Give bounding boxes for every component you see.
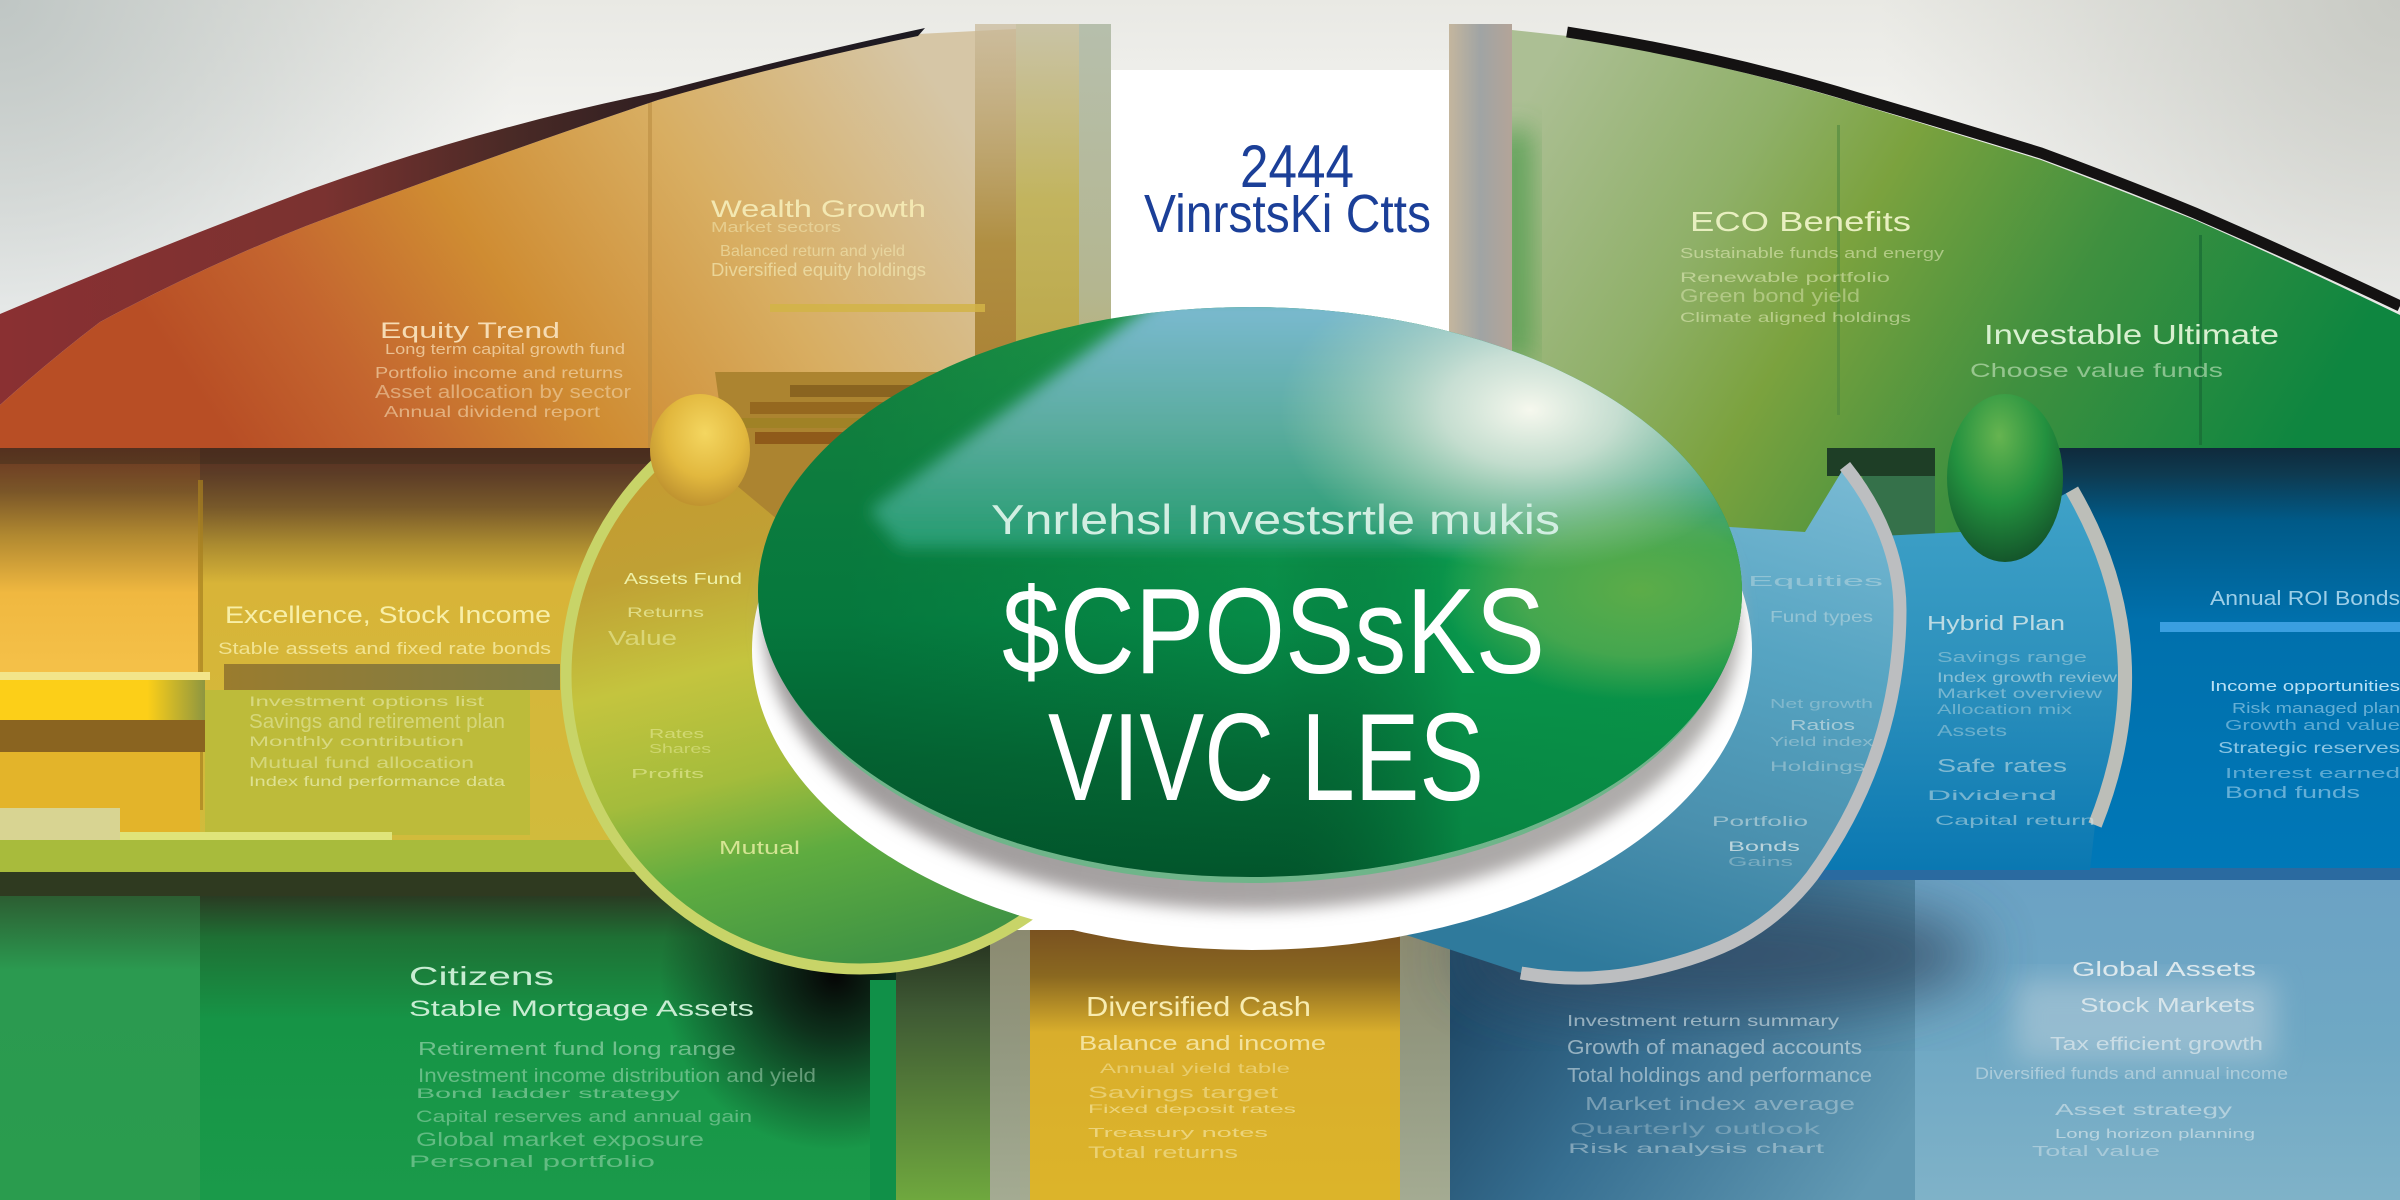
text block: blue right: Tax efficient growth — [2050, 1034, 2263, 1054]
text block: blue: Growth and value — [2225, 717, 2400, 734]
highlight bar — [0, 672, 210, 680]
title — [1144, 133, 1431, 244]
text block: blue left: Quarterly outlook — [1570, 1121, 1822, 1138]
text block: blue right: Long horizon planning — [2055, 1126, 2255, 1141]
lens highlight — [1298, 314, 1716, 562]
text block: blue right: Asset strategy — [2055, 1102, 2232, 1119]
beige tab — [0, 808, 120, 840]
dark edge line — [1567, 32, 2400, 306]
text block: green light: Sustainable funds and energy — [1680, 245, 1945, 262]
text block: blue: Annual ROI Bonds — [2210, 588, 2400, 610]
text block: yellow: Diversified Cash — [1086, 991, 1311, 1022]
text block: green: Capital reserves and annual gain — [416, 1107, 752, 1126]
edge shade — [1500, 130, 1530, 360]
ball: yellow — [650, 394, 750, 506]
olive band — [0, 840, 640, 872]
column: grey strip — [1449, 24, 1512, 364]
text block: blue left: Market index average — [1585, 1094, 1855, 1114]
text block: ring two: Dividend — [1927, 787, 2057, 803]
text block: ring one: Equities — [1748, 573, 1883, 590]
ring panel: yellow-green circle — [566, 381, 1154, 969]
panel: yellow bottom-centre — [990, 930, 1450, 1200]
divider — [198, 480, 203, 810]
text block: olive: Monthly contribution — [249, 733, 464, 749]
text block: blue right: Global Assets — [2072, 959, 2256, 981]
panel: yellow row — [0, 448, 800, 872]
mottled notch lower — [1862, 476, 1935, 540]
text block: ring two: Index growth review — [1937, 669, 2118, 685]
panel: green bottom-left — [0, 800, 1050, 1200]
ball: green — [1947, 394, 2063, 562]
text block: yellow header: Excellence, Stock Income — [225, 602, 551, 629]
text block: orange — [375, 318, 631, 421]
text block: green light: Renewable portfolio — [1680, 269, 1890, 285]
text block: ring one — [1712, 573, 1883, 869]
text block: ring one: Bonds — [1728, 838, 1800, 854]
text block: circle: Rates — [649, 726, 705, 741]
text block: ring two: Hybrid Plan — [1927, 613, 2065, 635]
pale green rim — [762, 313, 1738, 883]
panel: top-left orange — [0, 24, 1111, 470]
dark notch top — [1827, 448, 1935, 476]
footer strip — [1800, 868, 2400, 880]
text block: orange: Equity Trend — [380, 318, 560, 343]
text block: blue left: Total holdings and performance — [1567, 1065, 1872, 1087]
olive header bar — [224, 664, 560, 690]
text block: gold: Market sectors — [711, 219, 841, 236]
text block: circle: Profits — [631, 766, 705, 781]
text block: circle: Value — [608, 628, 677, 650]
strip: green edge — [870, 980, 896, 1200]
text block: yellow: Treasury notes — [1088, 1125, 1269, 1140]
column: right shading — [975, 24, 1016, 464]
text block: ring one: Net growth — [1770, 696, 1873, 711]
text block: ring one: Portfolio — [1712, 813, 1808, 829]
text block: ring two: Market overview — [1937, 685, 2103, 701]
lens teal dome — [870, 296, 1750, 548]
text block: olive: Mutual fund allocation — [249, 755, 474, 772]
text block: ring one: Fund types — [1770, 609, 1873, 626]
column: grey right — [1400, 930, 1450, 1200]
text block: blue: Income opportunities — [2210, 678, 2400, 695]
text block: green light — [1680, 206, 1945, 325]
text block: gold: Wealth Growth — [711, 196, 926, 223]
divider — [648, 100, 652, 450]
text block: orange: Portfolio income and returns — [375, 365, 623, 382]
text block: green: Global market exposure — [416, 1130, 704, 1151]
text block: green dark: Investable Ultimate — [1984, 319, 2279, 350]
light bar — [2160, 622, 2400, 632]
brown bar — [0, 720, 205, 752]
ring panel: far blue arc — [1800, 490, 2125, 870]
text block: blue: Interest earned — [2225, 765, 2400, 782]
text block: yellow: Total returns — [1088, 1143, 1238, 1162]
lens headline: line one: $CPOSsKS — [1002, 563, 1545, 699]
top shadow — [1460, 895, 1980, 1015]
text block: circle: Returns — [627, 604, 704, 620]
column: yellow strip — [1016, 24, 1079, 464]
text block: gold: Diversified equity holdings — [711, 260, 926, 280]
dark edge band — [0, 28, 925, 405]
top shadow — [0, 872, 640, 896]
text block: green: Stable Mortgage Assets — [409, 996, 754, 1021]
text block: blue left — [1567, 1013, 1872, 1156]
column: right light — [1915, 880, 2400, 1200]
text block: blue right: Diversified funds and annual income — [1975, 1064, 2288, 1083]
text block: blue right: Stock Markets — [2080, 995, 2255, 1017]
text block: ring one: Ratios — [1790, 717, 1855, 734]
text block: blue: Strategic reserves — [2218, 740, 2400, 757]
text block: yellow header — [218, 602, 551, 658]
panel: blue right — [1800, 448, 2400, 880]
column: bright left — [0, 448, 200, 738]
text block: ring two: Assets — [1937, 723, 2007, 740]
haze patch — [2015, 980, 2275, 1060]
white crescent under lens — [752, 313, 1752, 950]
text block: green light: Green bond yield — [1680, 286, 1860, 306]
text block: green: Investment income distribution and yield — [418, 1066, 816, 1087]
text block: blue: Bond funds — [2225, 783, 2360, 802]
text block: yellow header: Stable assets and fixed rate bonds — [218, 639, 551, 658]
text block: ring two: Savings range — [1937, 649, 2087, 666]
lens: central oval — [758, 307, 1742, 877]
column: left strip — [0, 872, 200, 1200]
ring panel: light blue circle — [1300, 466, 1900, 978]
text block: olive: Investment options list — [249, 693, 484, 709]
text block: circle: Shares — [649, 741, 712, 756]
text block: olive: Savings and retirement plan — [249, 711, 505, 733]
column: grey edge — [1079, 24, 1111, 464]
text block: blue: Risk managed plan — [2232, 700, 2400, 717]
text block: ring two: Safe rates — [1937, 756, 2067, 776]
text block: yellow: Savings target — [1088, 1083, 1278, 1102]
text block: olive — [249, 693, 505, 789]
text block: green dark — [1970, 319, 2279, 382]
lower left gold — [0, 752, 200, 842]
panel: top-right green — [1449, 24, 2400, 560]
text block: ring two: Allocation mix — [1937, 701, 2072, 717]
stacked steps — [715, 372, 980, 530]
text block: blue left: Risk analysis chart — [1568, 1140, 1824, 1156]
text block: orange: Long term capital growth fund — [385, 341, 625, 358]
divider — [2199, 235, 2202, 445]
stripe accent — [770, 304, 985, 312]
text block: yellow: Fixed deposit rates — [1088, 1102, 1296, 1116]
text block: green: Retirement fund long range — [418, 1039, 736, 1059]
title: 2444 — [1240, 133, 1354, 200]
divider — [1837, 125, 1840, 415]
lens side tones — [750, 300, 1750, 880]
corner shadow — [620, 800, 1050, 1200]
text block: yellow — [1079, 991, 1326, 1162]
text block: ring two — [1927, 613, 2118, 828]
text block: green: Bond ladder strategy — [416, 1085, 680, 1101]
lens headline: line two: VIVC LES — [1048, 689, 1484, 827]
text block: ring one: Gains — [1728, 854, 1794, 869]
text block: circle: Mutual — [719, 838, 800, 858]
text block: green light: ECO Benefits — [1690, 206, 1911, 237]
grey shadow band — [764, 340, 1740, 910]
highlight line — [120, 832, 392, 840]
ring outline — [2072, 490, 2125, 825]
text block: circle — [608, 571, 800, 858]
text block: green dark: Choose value funds — [1970, 361, 2223, 382]
text block: green light: Climate aligned holdings — [1680, 309, 1911, 325]
text block: yellow: Annual yield table — [1100, 1060, 1290, 1076]
top shadow — [0, 448, 650, 464]
text block: blue left: Investment return summary — [1567, 1013, 1839, 1030]
lens subheading: Ynrlehsl Investsrtle mukis — [991, 496, 1560, 543]
text block: blue right — [1975, 959, 2288, 1160]
text block: orange: Asset allocation by sector — [375, 382, 631, 402]
text block: blue left: Growth of managed accounts — [1567, 1037, 1862, 1059]
ring outline — [1521, 466, 1900, 978]
title: VinrstsKi Ctts — [1144, 184, 1431, 244]
text block: orange: Annual dividend report — [384, 404, 601, 421]
text block: green — [409, 961, 816, 1171]
text block: blue — [2210, 588, 2400, 802]
olive sub-panel — [205, 690, 530, 835]
strip: fade column — [896, 930, 990, 1200]
yellow bar — [0, 680, 205, 720]
text block: yellow: Balance and income — [1079, 1033, 1326, 1055]
text block: ring one: Holdings — [1770, 758, 1865, 774]
text block: gold — [711, 196, 926, 280]
text block: green: Citizens — [409, 961, 554, 991]
lens green right — [1452, 494, 1742, 694]
text block: olive: Index fund performance data — [249, 773, 505, 789]
text block: ring one: Yield index — [1770, 734, 1874, 749]
text block: gold: Balanced return and yield — [720, 243, 905, 260]
text block: ring two: Capital return — [1935, 812, 2095, 828]
panel: blue bottom-right — [1450, 880, 2400, 1200]
text block: green: Personal portfolio — [409, 1152, 655, 1171]
text block: circle: Assets Fund — [624, 571, 742, 588]
column: grey left — [990, 930, 1030, 1200]
text block: blue right: Total value — [2032, 1143, 2160, 1160]
